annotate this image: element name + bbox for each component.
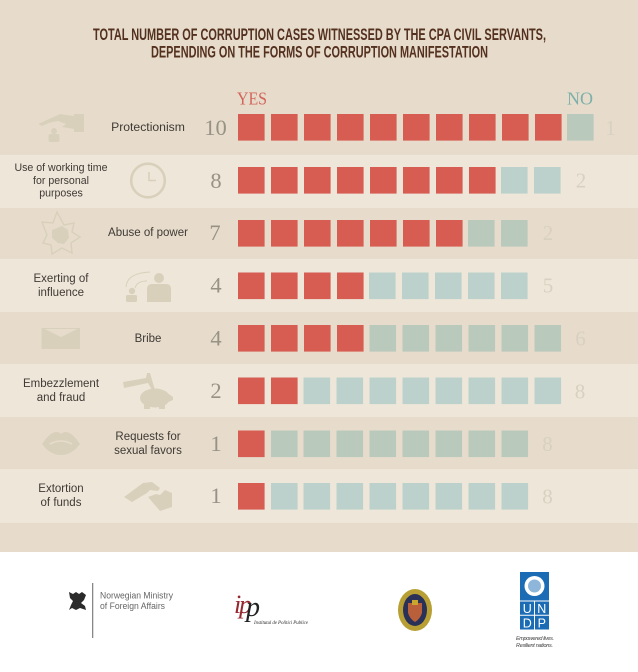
row 5: bribe [42,325,586,352]
row band [0,364,638,417]
label: sexual favors [114,445,182,457]
label: Use of working time [14,162,108,174]
no count: 8 [542,484,553,508]
no count: 8 [542,432,553,456]
title [93,25,546,62]
yes legend: YES [237,88,267,108]
logo: UNDP: U [523,602,532,616]
squares [238,220,528,247]
label: Bribe [135,333,161,345]
logo: UNDP: Resilient nations. [516,643,553,649]
no count: 8 [575,380,585,404]
footer band [0,552,638,672]
icon: fist in burst [42,212,80,254]
logo: UNDP: Empowered lives. [516,636,554,642]
row 8: extortion of funds [0,469,638,523]
yes count: 4 [210,326,222,350]
logo: Norwegian Ministry of Foreign Affairs: of Foreign Affairs [100,601,165,611]
squares [238,483,528,510]
logo: Norwegian Ministry of Foreign Affairs [69,583,173,638]
squares [238,378,561,404]
logo: Institutul de Politici Publice: i [234,590,241,619]
squares [238,114,594,141]
yes count: 8 [210,168,222,193]
label: and fraud [37,392,85,404]
squares [238,325,561,352]
logo: UNDP: P [538,616,546,630]
label: Protectionism [111,120,185,134]
label: for personal [33,175,89,187]
squares [238,167,561,194]
row band [0,259,638,312]
icon: clock [131,164,165,197]
no count: 6 [575,326,586,350]
label: Embezzlement [23,378,100,390]
label: of funds [41,497,82,509]
icon: influence [126,272,171,302]
no count: 1 [605,116,616,140]
label: Extortion [38,483,84,495]
logo: Institutul de Politici Publice: p [237,590,252,619]
yes count: 1 [210,483,222,508]
no count: 2 [576,168,586,192]
yes count: 7 [209,220,221,245]
label: purposes [39,188,83,200]
icon: envelope [42,328,80,349]
icon: lips [42,432,80,455]
no legend: NO [567,88,593,108]
logo: Institutul de Politici Publice: Institutul de Politici Publice [253,621,309,626]
logo: UNDP [516,572,554,649]
row 2: use of working time [0,155,638,208]
logo: Institutul de Politici Publice [234,590,309,626]
yes count: 1 [210,431,222,456]
icon: hand over person [38,114,84,142]
row 7: requests for sexual favors [42,430,553,457]
logo: UNDP: D [523,616,532,630]
row band [0,155,638,208]
no count: 5 [543,274,553,298]
logo: UNDP: N [537,602,546,616]
row band [0,469,638,523]
squares [238,272,528,299]
label: Exerting of [34,273,89,285]
row 4: exerting of influence [0,259,638,312]
icon: hammer and piggy bank [123,373,173,409]
row 6: embezzlement and fraud [0,364,638,417]
yes count: 10 [204,115,227,140]
label: Abuse of power [108,227,188,239]
yes count: 2 [210,378,222,403]
logo: Moldova emblem [398,589,432,631]
icon: hand and money [124,482,172,511]
yes count: 4 [210,272,222,298]
label: Requests for [115,431,181,443]
label: influence [38,287,84,299]
logo: Institutul de Politici Publice: p [244,592,260,623]
squares [238,430,528,457]
no count: 2 [543,221,553,245]
row 3: abuse of power [42,212,553,254]
row 1: protectionism [38,114,616,142]
logo: Norwegian Ministry of Foreign Affairs: Norwegian Ministry [100,590,173,600]
